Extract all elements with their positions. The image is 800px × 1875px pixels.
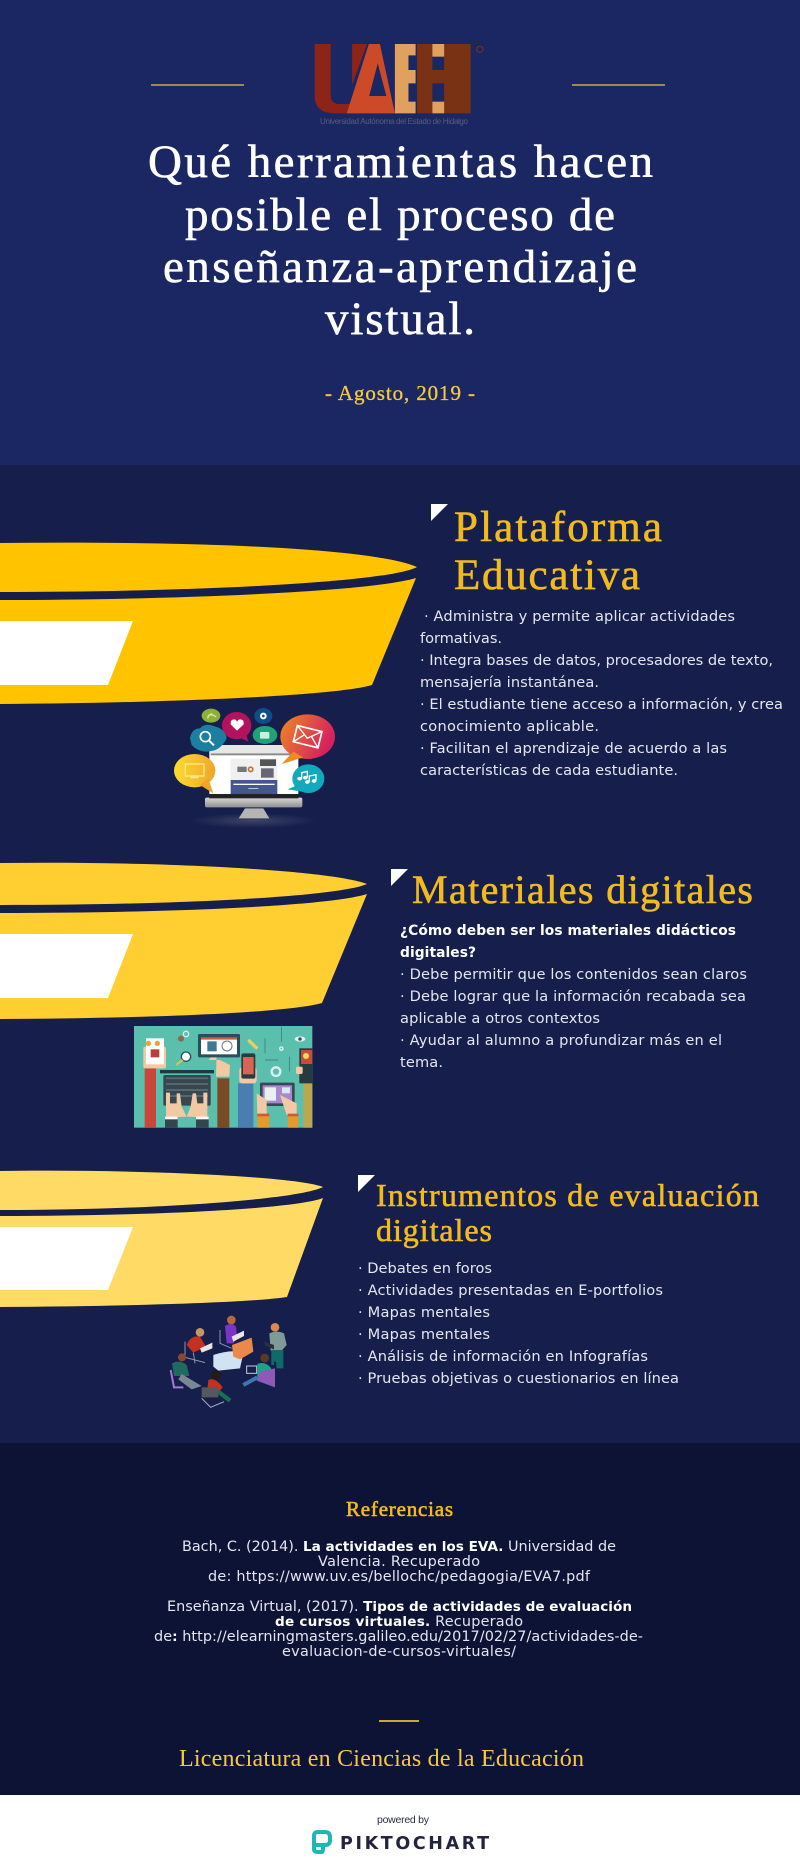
panel: header background [0, 0, 800, 465]
text block: instruments: · Pruebas objetivas o cuestionarios en línea [358, 1370, 679, 1387]
right header line [572, 84, 665, 86]
text block: platform bullets [420, 608, 783, 779]
illustration: web monitor with chat bubbles [174, 708, 335, 828]
title: posible el proceso de [185, 189, 615, 241]
text block: reference 1: Bach, C. (2014). La actividades en los EVA. Universidad de [182, 1539, 616, 1555]
text block: instruments: · Debates en foros [358, 1260, 492, 1277]
footer line [379, 1720, 419, 1722]
logo: UAEH [315, 44, 483, 113]
decoration: triangle marker 1 [431, 504, 448, 521]
shape: band 3 [0, 1171, 323, 1307]
text block: materials: · Debe permitir que los contenidos sean claros [400, 966, 747, 983]
title: Qué herramientas hacen [148, 136, 653, 188]
heading: Instrumentos de evaluación digitales: digitales [376, 1212, 492, 1248]
text block: platform bullets: · El estudiante tiene acceso a información, y crea [420, 696, 783, 713]
text block: reference 2: de: http://elearningmasters.galileo.edu/2017/02/27/actividades-de- [154, 1629, 643, 1645]
program name: Licenciatura en Ciencias de la Educación [179, 1746, 584, 1772]
text block: instruments [358, 1260, 679, 1387]
heading: Materiales digitales: Materiales digitales [412, 867, 753, 912]
text block: platform bullets: características de cada estudiante. [420, 762, 678, 779]
heading: Plataforma Educativa: Educativa [454, 552, 640, 599]
heading: Plataforma Educativa: Plataforma [454, 504, 662, 551]
text block: platform bullets: conocimiento aplicable. [420, 718, 599, 735]
illustration: group of students with laptops [171, 1316, 287, 1407]
decoration: triangle marker 3 [358, 1175, 375, 1192]
text block: instruments: · Mapas mentales [358, 1304, 490, 1321]
heading: Referencias: Referencias [346, 1497, 453, 1521]
text block: materials: digitales? [400, 945, 476, 961]
shape: band 1 [0, 543, 417, 704]
text block: platform bullets: · Administra y permite aplicar actividades [424, 608, 735, 625]
date: - Agosto, 2019 - [325, 381, 475, 405]
text block: instruments: · Análisis de información en Infografías [358, 1348, 648, 1365]
illustration: hands with digital devices [134, 1026, 312, 1128]
title: vistual. [325, 293, 475, 345]
text block: reference 2 [154, 1599, 643, 1660]
text block: reference 2: evaluacion-de-cursos-virtuales/ [282, 1644, 516, 1660]
text block: reference 1: Valencia. Recuperado [318, 1554, 480, 1570]
heading: Plataforma Educativa [454, 504, 662, 599]
text block: platform bullets: · Facilitan el aprendizaje de acuerdo a las [420, 740, 727, 757]
text block: materials: tema. [400, 1054, 443, 1071]
text block: materials: · Ayudar al alumno a profundizar más en el [400, 1032, 722, 1049]
shape: band 2 [0, 863, 367, 1019]
text block: materials: aplicable a otros contextos [400, 1010, 600, 1027]
panel: content background [0, 465, 800, 1443]
text block: instruments: · Actividades presentadas en E-portfolios [358, 1282, 663, 1299]
heading: Instrumentos de evaluación digitales: Instrumentos de evaluación [376, 1177, 759, 1213]
logo caption: Universidad Autónoma del Estado de Hidalgo [320, 117, 469, 126]
heading: Instrumentos de evaluación digitales [376, 1177, 759, 1248]
title: enseñanza-aprendizaje [163, 241, 637, 293]
text block: materials [400, 923, 747, 1071]
text block: reference 2: Enseñanza Virtual, (2017). Tipos de actividades de evaluación [167, 1599, 632, 1615]
panel: references background [0, 1443, 800, 1795]
text block: platform bullets: · Integra bases de datos, procesadores de texto, [420, 652, 773, 669]
powered by label: powered by [377, 1814, 430, 1826]
text block: reference 1: de: https://www.uv.es/bellochc/pedagogia/EVA7.pdf [208, 1569, 591, 1585]
decoration: triangle marker 2 [391, 869, 408, 886]
title [148, 136, 653, 345]
text block: platform bullets: mensajería instantánea. [420, 674, 599, 691]
text block: materials: ¿Cómo deben ser los materiales didácticos [400, 923, 736, 939]
text block: platform bullets: formativas. [420, 630, 502, 647]
text block: materials: · Debe lograr que la información recabada sea [400, 988, 746, 1005]
panel: powered by footer [0, 1795, 800, 1875]
left header line [151, 84, 244, 86]
text block: reference 1 [182, 1539, 616, 1585]
Piktochart wordmark: PIKTOCHART [340, 1834, 489, 1854]
icon: Piktochart logo [314, 1832, 330, 1852]
text block: instruments: · Mapas mentales [358, 1326, 490, 1343]
text block: reference 2: de cursos virtuales. Recuperado [275, 1614, 523, 1630]
